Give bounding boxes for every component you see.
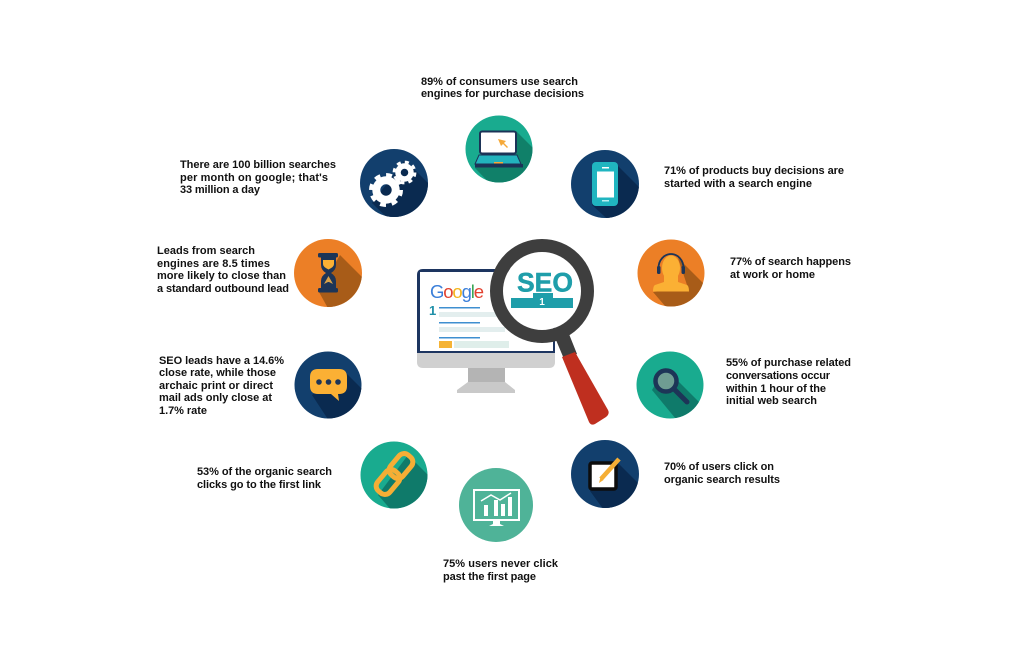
text: 55% of purchase related: within 1 hour of the [725,383,826,395]
SEO podium: SEO [517,268,573,298]
icon: hourglass [294,239,362,307]
icon: magnifier [636,352,704,418]
text: 89% of consumers [421,76,584,100]
text: 55% of purchase related [725,357,851,407]
text: 89% of consumers: 89% of consumers use search [421,76,578,88]
SEO podium: 1 [539,297,545,308]
monitor [417,269,555,393]
text: SEO leads close rate: mail ads only close at [159,392,272,404]
text: leads from search engines [157,245,289,295]
text: 55% of purchase related: 55% of purchase related [726,357,851,369]
icon: analytics monitor [459,468,533,542]
icon: person with headset [638,240,704,306]
text: SEO leads close rate: close rate, while those [159,367,276,379]
text: 77% of search [730,256,851,281]
search result lines: 1 [429,303,436,318]
text: SEO leads close rate: SEO leads have a 14.6% [159,355,284,367]
text: 89% of consumers: engines for purchase decisions [421,88,584,100]
infographic canvas [157,77,851,582]
text: 77% of search: at work or home [730,269,815,281]
text: 77% of search: 77% of search happens [730,256,851,268]
text: SEO leads close rate: archaic print or direct [159,380,273,392]
text: 71% of products: started with a search engine [664,178,812,190]
text: SEO leads close rate: 1.7% rate [159,405,207,417]
text: 53% organic clicks [197,466,332,491]
text: 75% users: past the first page [443,571,536,583]
text: 55% of purchase related: initial web search [726,395,817,407]
icon: chain link [360,442,428,508]
text: leads from search engines: engines are 8.5 times [157,258,270,270]
SEO podium [511,268,573,308]
text: 100 billion searches: per month on google; that's [180,172,328,184]
text: 70% of users: organic search results [664,474,780,486]
magnifying glass [496,246,609,425]
icon: note and pencil [571,440,639,508]
text: 53% organic clicks: 53% of the organic search [197,466,332,478]
icon: chat bubble [294,352,362,418]
text: leads from search engines: a standard outbound lead [157,283,289,295]
text: 100 billion searches: There are 100 billion searches [180,159,336,171]
icon: gears [360,149,428,217]
text: 70% of users [664,461,780,486]
text: 53% organic clicks: clicks go to the first link [197,479,322,491]
text: 55% of purchase related: conversations occur [726,370,831,382]
text: leads from search engines: Leads from search [157,245,255,257]
icon: smartphone [571,150,639,218]
text: leads from search engines: more likely to close than [157,270,286,282]
text: 100 billion searches [180,159,336,196]
icon: laptop [466,116,532,182]
text: 100 billion searches: 33 million a day [180,184,261,196]
google logo: Google [430,281,484,302]
text: 75% users: 75% users never click [443,558,559,570]
central illustration: monitor and magnifier [417,246,609,425]
text: 75% users [443,558,559,583]
text: SEO leads close rate [159,355,284,417]
text: 71% of products: 71% of products buy decisions are [664,165,844,177]
text: 70% of users: 70% of users click on [664,461,774,473]
text: 71% of products [664,165,844,190]
